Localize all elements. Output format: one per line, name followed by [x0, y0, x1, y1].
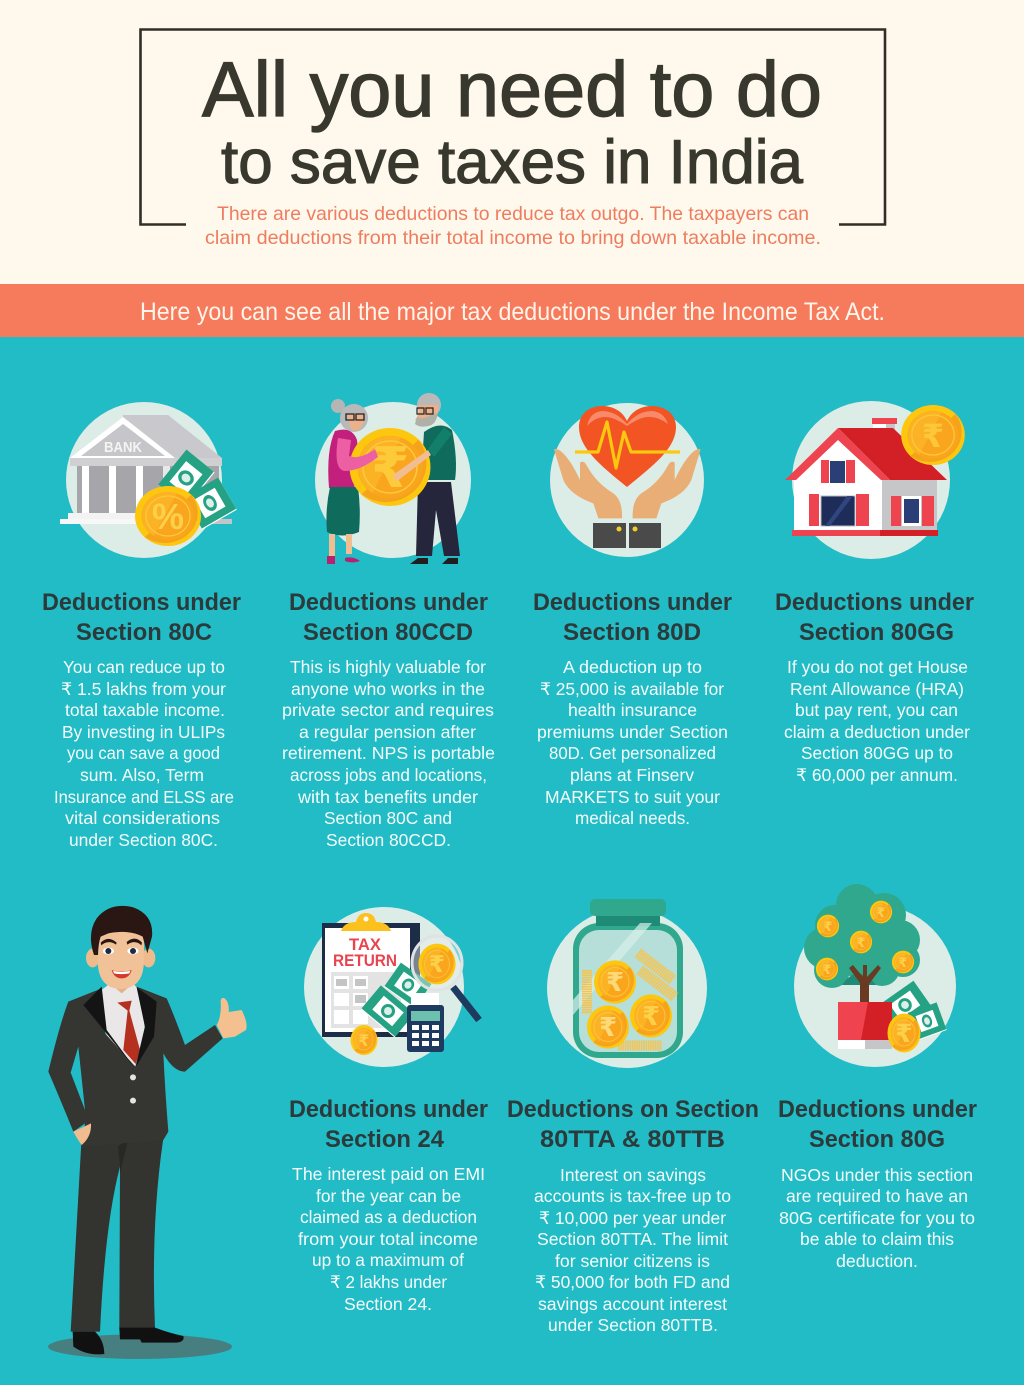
lapels	[83, 987, 135, 1068]
ears and face	[86, 949, 99, 967]
panel: Section 80D	[533, 403, 732, 828]
body text: deduction.	[836, 1251, 918, 1271]
body text: NGOs under this section	[781, 1165, 973, 1185]
body text: Insurance and ELSS are	[54, 787, 234, 807]
buttons	[130, 1074, 136, 1080]
body text: retirement. NPS is portable	[282, 743, 495, 763]
icon: house with rupee coin	[785, 401, 965, 559]
body text: Section 80C and	[324, 808, 452, 828]
body text	[534, 1165, 731, 1335]
neck and shirt	[110, 977, 133, 1000]
icon: tax return clipboard, magnifier and calculator: RETURN	[333, 951, 397, 970]
heading: Deductions under	[778, 1096, 977, 1123]
body text	[537, 657, 728, 828]
body text: ₹ 60,000 per annum.	[796, 765, 958, 785]
body text: savings account interest	[538, 1294, 727, 1314]
body text: vital considerations	[65, 808, 220, 828]
icon: glass jar of coins	[547, 899, 707, 1068]
body text: health insurance	[568, 700, 697, 720]
body text: premiums under Section	[537, 722, 728, 742]
icon: house with rupee coin: ₹	[922, 418, 944, 454]
icon: tax return clipboard, magnifier and calculator: ₹	[358, 1033, 370, 1050]
body text: sum. Also, Term	[80, 765, 204, 785]
body text: under Section 80C.	[69, 830, 218, 850]
body text: The interest paid on EMI	[292, 1164, 485, 1184]
body text: anyone who works in the	[291, 679, 485, 699]
body text: If you do not get House	[787, 657, 968, 677]
body text: for senior citizens is	[555, 1251, 710, 1271]
icon: elderly couple holding a rupee coin: ₹	[371, 436, 409, 499]
icon: money tree in a pot: ₹	[895, 1020, 913, 1048]
heading: Section 80C	[76, 619, 212, 646]
heading	[778, 1096, 977, 1153]
subtitle: There are various deductions to reduce tax outgo. The taxpayers can	[217, 203, 809, 225]
title	[202, 45, 822, 197]
body text: private sector and requires	[282, 700, 494, 720]
title: to save taxes in India	[221, 128, 804, 197]
heading: Deductions under	[775, 589, 974, 616]
body text: Section 24.	[344, 1294, 432, 1314]
body text	[784, 657, 970, 785]
icon: money tree in a pot: ₹	[876, 905, 886, 920]
subtitle	[205, 203, 821, 249]
body text: By investing in ULIPs	[62, 722, 225, 742]
heading: 80TTA & 80TTB	[540, 1126, 725, 1153]
body text: MARKETS to suit your	[545, 787, 720, 807]
body text: for the year can be	[316, 1186, 461, 1206]
body text	[282, 657, 495, 850]
man	[410, 393, 460, 564]
body text: Section 80CCD.	[326, 830, 451, 850]
body text: 80G certificate for you to	[779, 1208, 975, 1228]
heading: Deductions under	[289, 589, 488, 616]
header frame	[140, 30, 885, 224]
heading: Deductions under	[42, 589, 241, 616]
icon: bank with coin and banknotes: %	[152, 496, 184, 537]
icon: tax return clipboard, magnifier and calculator: TAX	[349, 935, 382, 954]
body text: 80D. Get personalized	[549, 743, 716, 763]
body text: plans at Finserv	[570, 765, 694, 785]
icon: money tree in a pot: ₹	[823, 919, 833, 934]
banner: Here you can see all the major tax deductions under the Income Tax Act.	[140, 298, 885, 326]
body text: Section 80TTA. The limit	[537, 1229, 728, 1249]
heading	[289, 589, 488, 646]
body text: medical needs.	[575, 808, 690, 828]
woman's arm	[337, 438, 378, 471]
body text: are required to have an	[786, 1186, 968, 1206]
panel: Sections 80TTA and 80TTB	[507, 899, 759, 1335]
panel: Section 80C	[42, 402, 241, 850]
heading	[533, 589, 732, 646]
body text: under Section 80TTB.	[548, 1315, 718, 1335]
illustration: businessman giving thumbs up	[48, 906, 247, 1359]
heading	[507, 1096, 759, 1153]
panel: Section 80G	[778, 884, 977, 1271]
page background: teal body	[0, 337, 1024, 1385]
body text: with tax benefits under	[297, 787, 478, 807]
page background: cream header	[0, 0, 1024, 284]
icon: hands holding a heart	[550, 403, 704, 557]
heading: Section 24	[325, 1126, 444, 1153]
heading: Section 80D	[563, 619, 701, 646]
body text	[54, 657, 234, 850]
heading: Deductions on Section	[507, 1096, 759, 1123]
icon: money tree in a pot: ₹	[898, 955, 908, 970]
body text: but pay rent, you can	[795, 700, 958, 720]
body text: total taxable income.	[65, 700, 225, 720]
trousers	[71, 1137, 163, 1332]
heading	[775, 589, 974, 646]
body text: a regular pension after	[299, 722, 476, 742]
icon: glass jar of coins: ₹	[599, 1012, 617, 1042]
jacket	[48, 987, 223, 1147]
icon: glass jar of coins: ₹	[606, 967, 624, 997]
body text: ₹ 10,000 per year under	[539, 1208, 726, 1228]
body text: claim a deduction under	[784, 722, 970, 742]
icon: bank with coin and banknotes	[60, 402, 237, 558]
subtitle: claim deductions from their total income to bring down taxable income.	[205, 227, 821, 249]
icon: tax return clipboard, magnifier and calculator	[304, 907, 479, 1067]
woman	[326, 399, 368, 564]
body text: Section 80GG up to	[801, 743, 953, 763]
title: All you need to do	[202, 45, 822, 133]
body text	[779, 1165, 975, 1271]
shoes	[73, 1332, 104, 1354]
body text: Interest on savings	[560, 1165, 706, 1185]
body text: claimed as a deduction	[300, 1207, 477, 1227]
body text: ₹ 1.5 lakhs from your	[61, 679, 226, 699]
heading: Section 80CCD	[303, 619, 473, 646]
body text: Rent Allowance (HRA)	[790, 679, 964, 699]
body text: up to a maximum of	[312, 1250, 464, 1270]
heading	[42, 589, 241, 646]
icon: elderly couple holding a rupee coin	[315, 393, 471, 564]
icon: money tree in a pot: ₹	[856, 935, 866, 950]
body text: ₹ 2 lakhs under	[330, 1272, 447, 1292]
heading: Section 80G	[809, 1126, 945, 1153]
body text: ₹ 50,000 for both FD and	[535, 1272, 730, 1292]
panel: Section 80CCD	[282, 393, 495, 850]
body text: across jobs and locations,	[290, 765, 487, 785]
panel: Section 80GG	[775, 401, 974, 785]
man's arm	[393, 450, 431, 482]
body text: you can save a good	[67, 743, 220, 763]
body text: ₹ 25,000 is available for	[540, 679, 724, 699]
body text: A deduction up to	[563, 657, 702, 677]
panel: Section 24	[289, 907, 488, 1314]
body text: from your total income	[298, 1229, 478, 1249]
banner	[0, 284, 1024, 337]
eyes and brows	[101, 939, 117, 945]
heading: Deductions under	[533, 589, 732, 616]
body text: You can reduce up to	[63, 657, 225, 677]
heading: Deductions under	[289, 1096, 488, 1123]
heading	[289, 1096, 488, 1153]
hands	[73, 1123, 91, 1145]
icon: tax return clipboard, magnifier and calculator: ₹	[429, 951, 445, 977]
body text: accounts is tax-free up to	[534, 1186, 731, 1206]
body text: be able to claim this	[800, 1229, 954, 1249]
body text	[292, 1164, 485, 1314]
icon: money tree in a pot	[794, 884, 956, 1067]
heading: Section 80GG	[799, 619, 954, 646]
icon: glass jar of coins: ₹	[642, 1001, 660, 1031]
tie	[117, 1001, 140, 1064]
hair	[91, 906, 152, 955]
icon: bank with coin and banknotes: BANK	[104, 440, 142, 456]
mouth	[112, 970, 132, 978]
body text: This is highly valuable for	[290, 657, 486, 677]
icon: money tree in a pot: ₹	[822, 962, 832, 977]
